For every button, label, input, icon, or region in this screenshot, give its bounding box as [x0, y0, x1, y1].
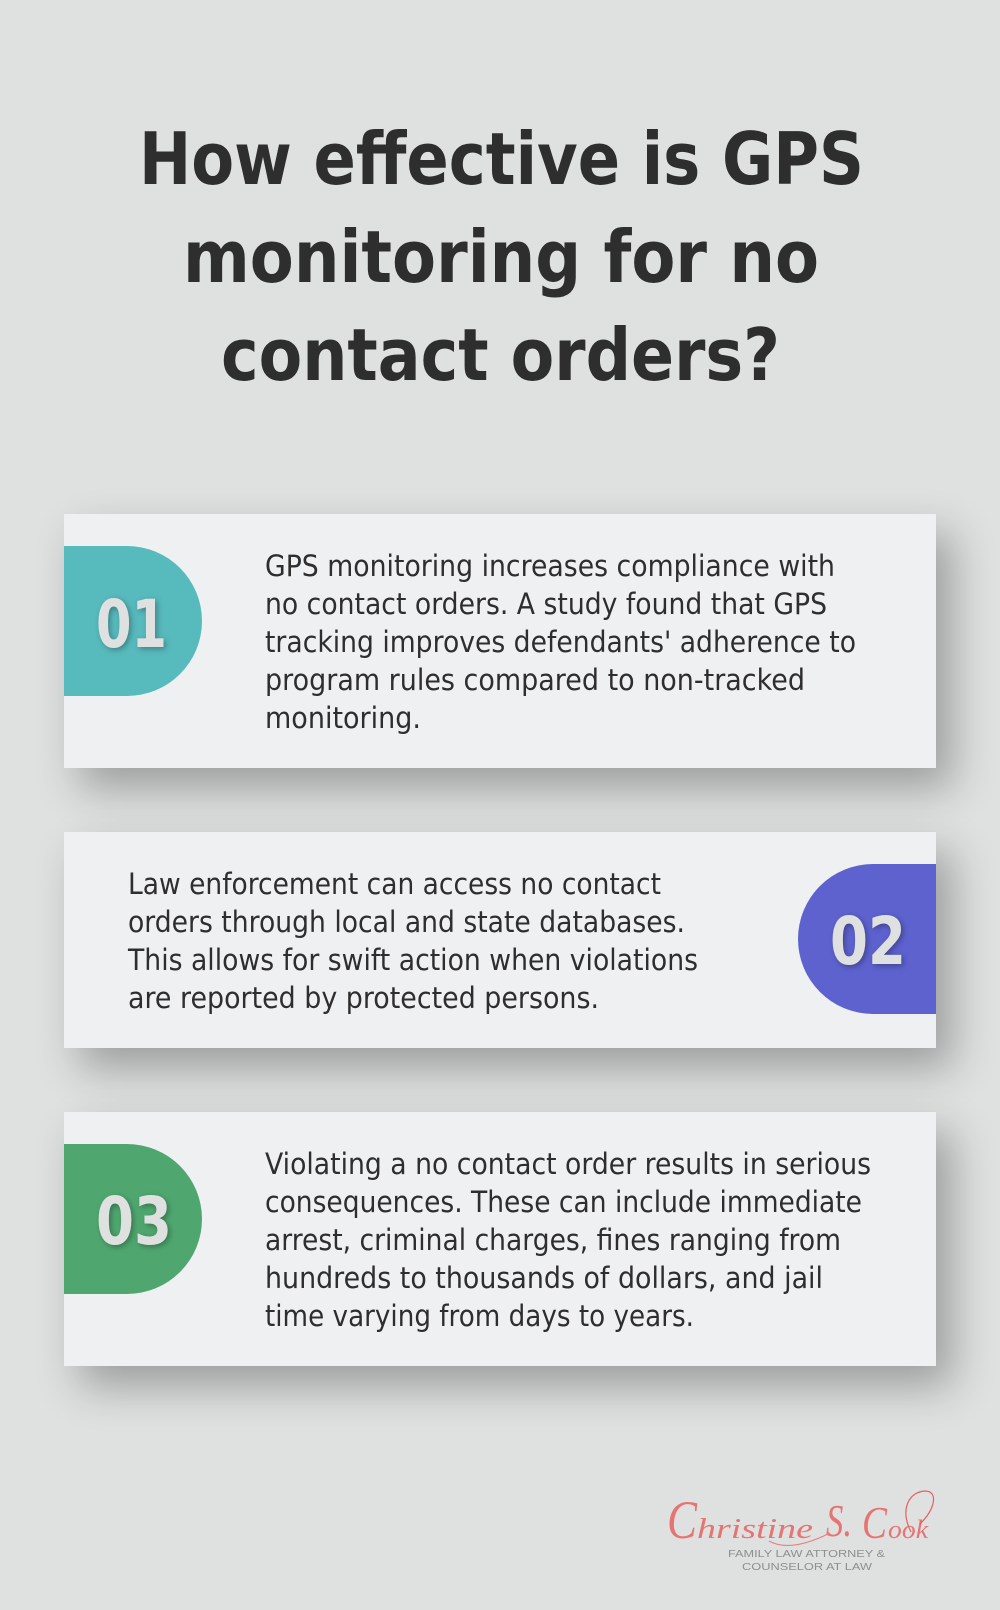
title: How effective is GPS — [139, 117, 864, 201]
text: step 03 description: time varying from days to years. — [265, 1299, 694, 1333]
badge: 02: 02 — [830, 903, 906, 980]
text: step 01 description: program rules compared to non-tracked — [265, 663, 805, 697]
logo: Christine S. Cook: S. — [826, 1495, 852, 1546]
badge: 03: 03 — [96, 1183, 172, 1260]
text: step 02 description: Law enforcement can access no contact — [128, 867, 661, 901]
text: step 02 description: This allows for swift action when violations — [127, 943, 698, 977]
logo: Christine S. Cook: ook — [888, 1515, 928, 1544]
logo: Christine S. Cook — [667, 1490, 934, 1573]
badge: 03 — [64, 1144, 202, 1294]
text: step 02 description: are reported by protected persons. — [128, 981, 599, 1015]
text: step 03 description: Violating a no contact order results in serious — [265, 1147, 871, 1181]
text: step 01 description: tracking improves defendants' adherence to — [265, 625, 856, 659]
text: step 01 description: GPS monitoring increases compliance with — [265, 549, 835, 583]
panel: step 03 — [64, 1112, 936, 1366]
logo: Christine S. Cook: C — [667, 1490, 698, 1550]
text: step 03 description: hundreds to thousands of dollars, and jail — [265, 1261, 823, 1295]
text: step 01 description: monitoring. — [265, 701, 421, 735]
panel: step 01 — [64, 514, 936, 768]
badge: 02 — [798, 864, 936, 1014]
text: step 01 description: no contact orders. A study found that GPS — [265, 587, 827, 621]
text: step 03 description: consequences. These can include immediate — [265, 1185, 862, 1219]
text: step 01 description — [265, 549, 856, 735]
badge: 01: 01 — [96, 586, 167, 663]
text: step 02 description — [127, 867, 698, 1015]
badge: 01 — [64, 546, 202, 696]
panel: step 02 — [64, 832, 936, 1048]
logo: Christine S. Cook: COUNSELOR AT LAW — [742, 1561, 872, 1573]
title: monitoring for no — [183, 215, 819, 299]
title: contact orders? — [221, 313, 780, 397]
logo: Christine S. Cook: hristine — [697, 1514, 813, 1545]
text: step 03 description: arrest, criminal charges, fines ranging from — [265, 1223, 841, 1257]
title — [139, 117, 864, 397]
logo: Christine S. Cook: C — [862, 1497, 888, 1548]
text: step 03 description — [265, 1147, 871, 1333]
logo: Christine S. Cook: FAMILY LAW ATTORNEY & — [728, 1548, 885, 1560]
text: step 02 description: orders through local and state databases. — [128, 905, 685, 939]
